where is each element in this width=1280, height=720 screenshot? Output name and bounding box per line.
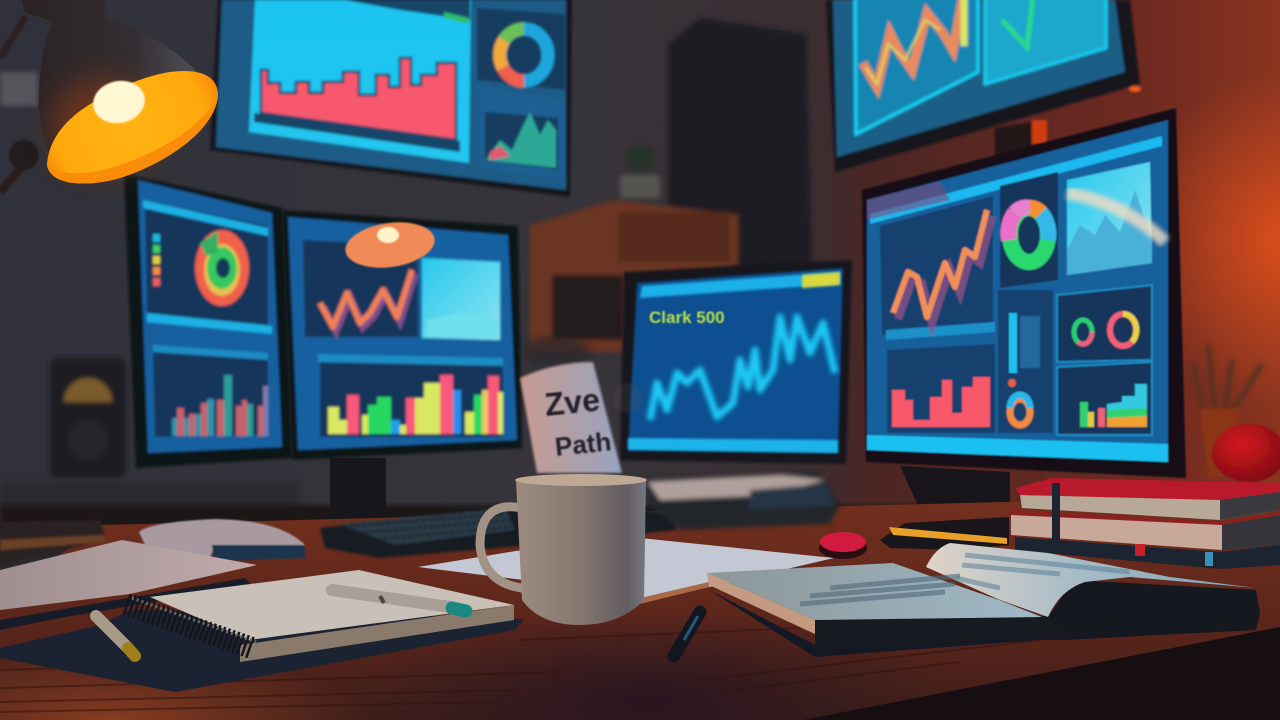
legend swatches [153, 234, 160, 286]
pen on desk [674, 612, 700, 656]
light glare [1067, 193, 1165, 242]
left monitor [124, 174, 292, 468]
sign text: Zve [543, 381, 602, 423]
left speaker and shelf [0, 358, 300, 516]
centre left monitor [282, 210, 522, 460]
stacked area panel [1057, 362, 1152, 435]
wall background [0, 0, 1280, 530]
top centre monitor [210, 0, 572, 197]
paper sign with handwritten text: Path [553, 426, 613, 462]
line chart: centre right monitor [650, 317, 835, 420]
white paper sheet behind mug [418, 538, 834, 604]
bar chart: left monitor [172, 375, 268, 436]
area chart: top monitor small [486, 112, 556, 168]
line chart: centre left monitor [323, 274, 415, 331]
paper roll [139, 519, 306, 561]
paper sign with handwritten text [520, 336, 622, 473]
spiral notebook [0, 570, 524, 692]
left writing pad [0, 540, 257, 630]
mouse [819, 532, 867, 559]
desk surface [0, 495, 1280, 720]
small KPI panel [998, 290, 1053, 433]
keyboard [320, 506, 676, 558]
line chart: right monitor [898, 216, 992, 323]
back furniture: tower and cabinet [530, 18, 812, 352]
bar chart: top monitor [261, 58, 456, 140]
coffee mug [480, 474, 647, 625]
left notebooks [0, 519, 306, 630]
top right monitor [826, 0, 1141, 172]
lamp [0, 0, 218, 192]
dark box on desk left [0, 520, 106, 565]
donut chart: left monitor [195, 230, 249, 306]
gold pen [96, 616, 135, 656]
line chart: top right monitor [863, 0, 963, 87]
lamp shell [20, 0, 208, 178]
right main monitor [862, 108, 1186, 478]
bar chart: right monitor [887, 344, 995, 433]
plant pot and apple [1192, 345, 1280, 482]
lamp arm [0, 16, 39, 192]
right page [926, 543, 1256, 617]
ring gauges panel [1057, 285, 1152, 362]
bar chart: centre left monitor [328, 375, 503, 434]
monitor title: Clark 500 [649, 308, 725, 327]
mug body [516, 480, 646, 625]
back right stack of paper under monitor [646, 472, 840, 530]
lamp bulb [89, 76, 149, 128]
donut chart: right monitor [1008, 208, 1048, 262]
book cover and spine block [709, 590, 1256, 657]
centre right monitor [620, 260, 852, 464]
monitor stands and dark under-desk band [0, 458, 1280, 535]
right book stack [1011, 478, 1280, 569]
monitor wall bracket [995, 120, 1047, 165]
donut chart: top monitor [500, 29, 548, 81]
silver pen [332, 590, 466, 611]
page text lines [800, 576, 960, 604]
lamp shade opening [47, 71, 218, 184]
left page [707, 563, 1042, 620]
open book [707, 543, 1260, 657]
mug rim [515, 474, 647, 486]
mug handle [480, 507, 534, 589]
pencil, dark notebook and mouse [819, 517, 1009, 559]
steam bubble [613, 383, 643, 413]
reflected lamp disc on screen [342, 217, 438, 273]
spiral binding [126, 598, 256, 648]
